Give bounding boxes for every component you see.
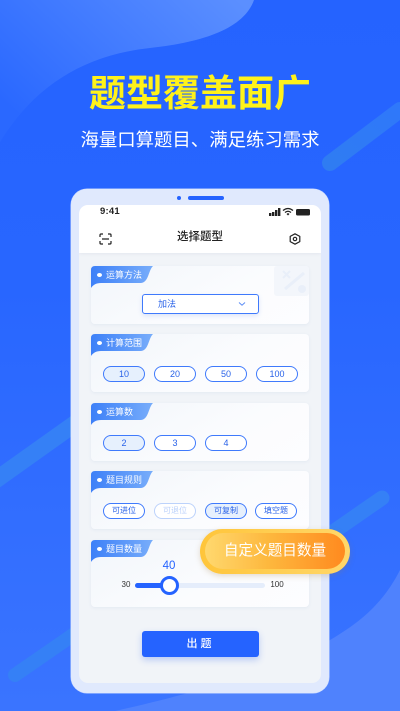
option: borrow, disabled: 可退位 [163,506,187,515]
option: repeat: 可复制 [214,506,238,515]
dropdown value: 加法 [158,299,176,309]
slider minimum: 30 [122,580,130,589]
option: fill in blank [255,503,297,519]
slider fill [135,583,171,588]
icon: percent watermark [274,266,309,296]
option: carry [103,503,145,519]
option: 10 [103,366,145,382]
icon: settings [290,233,300,245]
tag: operation method: 运算方法 [106,270,142,280]
phone camera dot [177,196,181,200]
icon: scan [99,233,112,245]
option: 50: 50 [221,369,231,379]
generate button [142,631,259,657]
slider value: 40 [163,560,175,572]
option: 100 [256,366,298,382]
tag: calculation range [91,334,153,356]
option: 4 [205,435,247,451]
option: 10: 10 [119,369,129,379]
option: 3: 3 [172,438,178,448]
callout inner pill [205,533,345,569]
tag: question count [91,540,153,562]
slider maximum: 100 [270,580,284,589]
tag: question rules: 题目规则 [106,475,142,485]
option: 2 [103,435,145,451]
panel: operation method [91,266,309,324]
option: 4: 4 [223,438,228,448]
phone speaker [188,196,224,200]
clock: 9:41 [100,206,120,217]
tag: operation method [91,266,153,288]
option: 3 [154,435,196,451]
callout inner pill: 自定义题目数量 [224,543,326,559]
option: 100: 100 [269,369,285,379]
nav title: 选择题型 [177,231,223,243]
option: 50 [205,366,247,382]
tag: calculation range: 计算范围 [106,338,142,348]
phone frame [71,189,329,693]
tag: operand count [91,403,153,425]
subtitle: 海量口算题目、满足练习需求 [80,129,320,150]
option: carry: 可进位 [112,506,136,515]
option: borrow, disabled [154,503,196,519]
panel: operand count [91,403,309,461]
option: 20: 20 [170,369,180,379]
option: 2: 2 [121,438,126,448]
icon: chevron [238,302,246,306]
status and navigation bar [79,205,321,253]
option: repeat [205,503,247,519]
panel: question count [91,540,309,607]
tag: question rules [91,471,153,493]
slider thumb [160,576,179,595]
tag: question count: 题目数量 [106,544,142,554]
tag: operand count: 运算数 [106,407,133,417]
status icons [269,208,310,216]
option: fill in blank: 填空题 [264,506,288,515]
option: 20 [154,366,196,382]
title: 题型覆盖面广 [89,73,311,114]
callout: custom question count [200,529,350,574]
dropdown [142,294,259,314]
slider track [135,583,265,588]
generate button: 出题 [186,638,214,650]
panel: question rules [91,471,309,529]
phone screen [79,205,321,683]
panel: calculation range [91,334,309,392]
